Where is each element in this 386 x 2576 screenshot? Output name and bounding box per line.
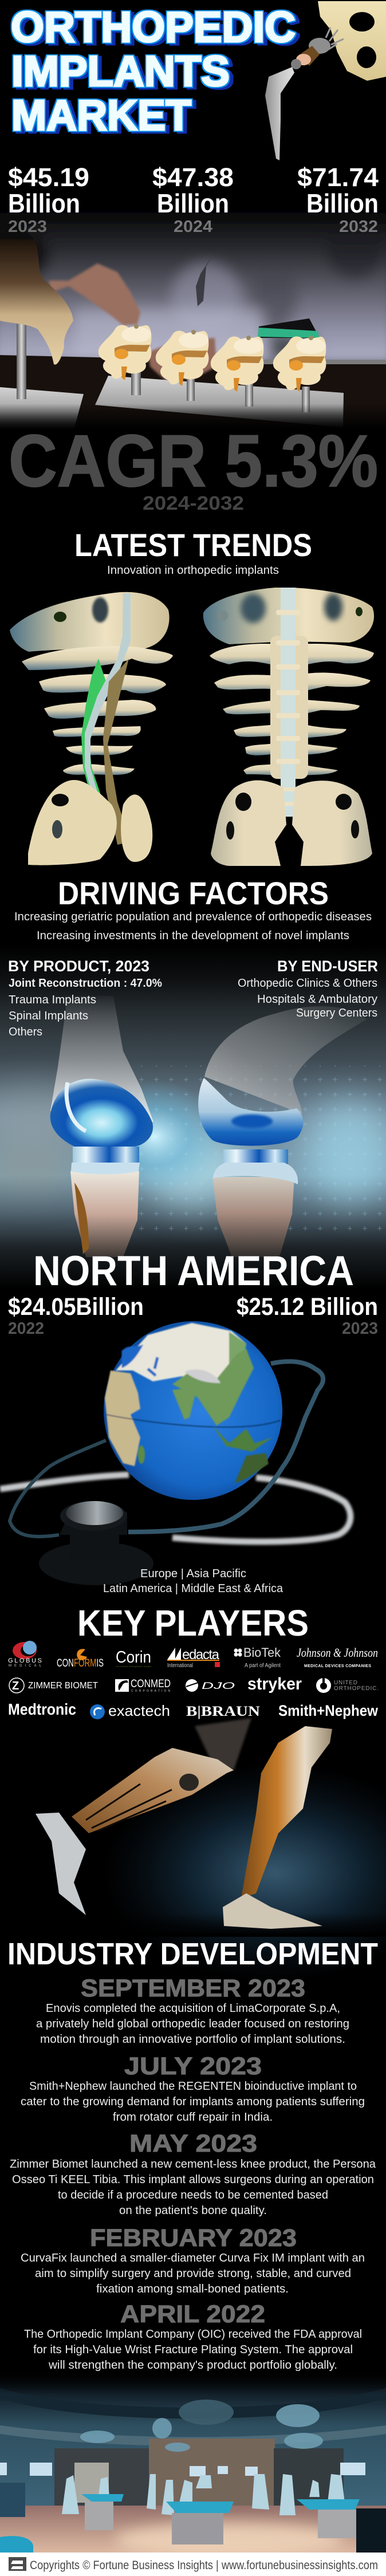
left skeleton model (0, 239, 73, 365)
logo: ConforMIS (57, 1649, 104, 1669)
stat: 2023 market size (8, 163, 89, 236)
logo: BioTek: A part of Agilent (245, 1663, 281, 1669)
title (11, 3, 296, 139)
development: July 2023 (21, 2053, 365, 2124)
upper hand (49, 263, 140, 325)
logo: United Orthopedic: UNITED (334, 1680, 357, 1686)
stat: 2024 market size: $47.38 (152, 163, 234, 192)
development: May 2023 (10, 2130, 376, 2217)
development: September 2023: motion through an innovative portfolio of implant solutions. (40, 2033, 345, 2046)
development: April 2022: The Orthopedic Implant Company (OIC) received the FDA approval (24, 2328, 362, 2341)
floor (0, 2506, 386, 2553)
development: September 2023: a privately held global orthopedic leader focused on restoring (36, 2018, 349, 2030)
top plate (10, 592, 170, 652)
left door (54, 2448, 149, 2508)
left tibial tray (71, 1147, 140, 1174)
image: operating room (0, 2371, 386, 2557)
monitors (0, 2463, 365, 2476)
development: September 2023 (36, 1975, 349, 2046)
latest trends text: Innovation in orthopedic implants (107, 564, 279, 577)
logo: BioTek: BioTek (243, 1645, 281, 1660)
left model base (0, 387, 84, 430)
pelvis left (28, 780, 152, 865)
vertebra model 1 (99, 324, 151, 380)
left femoral component (50, 1079, 153, 1147)
stat: north america 2022: 2022 (8, 1319, 44, 1338)
instrument bar (263, 360, 386, 364)
logo: Globus Medical: MEDICAL (9, 1664, 42, 1668)
development: April 2022 (24, 2301, 362, 2372)
by product list: Spinal Implants (9, 1010, 88, 1022)
regions text (103, 1567, 283, 1595)
stat: 2032 market size: $71.74 (297, 163, 379, 192)
right foot (223, 1893, 322, 1929)
acetabular cup (309, 38, 330, 54)
surgical lamps (80, 2400, 323, 2452)
development: February 2023 (21, 2224, 365, 2295)
heading: key players: KEY PLAYERS (77, 1602, 309, 1644)
vertebra model 4 (273, 336, 326, 392)
left foot (36, 1813, 86, 1915)
regions text: Latin America | Middle East & Africa (103, 1582, 283, 1595)
development: February 2023: CurvaFix launched a smaller-diameter Curva Fix IM implant with an (21, 2252, 365, 2264)
top plates (203, 588, 374, 644)
logo: stryker: stryker (247, 1675, 302, 1693)
by end-user list: Orthopedic Clinics & Others (238, 977, 377, 990)
logo: United Orthopedic: ORTHOPEDIC. (334, 1685, 379, 1692)
surgeons (62, 2474, 345, 2515)
stat: 2023 market size: $45.19 (8, 163, 89, 192)
background glow (103, 1764, 386, 1982)
left femur (50, 996, 153, 1122)
right tibial tray (213, 1149, 298, 1184)
image: spine side view with implant (10, 592, 173, 865)
by end-user list (238, 958, 378, 1019)
title: IMPLANTS (11, 47, 230, 95)
logo: ConforMIS: CONFORMIS (57, 1657, 104, 1669)
right tibia (212, 1177, 294, 1257)
globe sphere (104, 1321, 282, 1500)
logo: Zimmer Biomet: ZIMMER BIOMET (28, 1681, 98, 1691)
title: MARKET (11, 91, 191, 139)
ribs (22, 646, 173, 775)
implant green mesh (81, 659, 106, 810)
right femoral component (198, 1078, 303, 1146)
driving factors text: Increasing investments in the development of novel implants (37, 929, 349, 942)
development: May 2023: Osseo Ti KEEL Tibia. This implant allows surgeons during an operation (12, 2173, 374, 2186)
glow (0, 1088, 386, 1208)
development: February 2023: FEBRUARY 2023 (90, 2224, 297, 2252)
image: globe with stethoscope (0, 1321, 350, 1585)
side equipment (0, 2483, 386, 2553)
stat: 2024 market size: Billion (157, 188, 229, 218)
stat: north america 2022: $24.05Billion (8, 1293, 144, 1321)
development: May 2023: Zimmer Biomet launched a new cement-less knee product, the Persona (10, 2158, 376, 2171)
image: spine back view (203, 588, 374, 866)
heading: driving factors: DRIVING FACTORS (58, 875, 329, 911)
heading: latest trends: LATEST TRENDS (74, 527, 312, 563)
logo: Medacta (167, 1647, 220, 1669)
pelvis right (211, 780, 372, 866)
tablet on table (258, 318, 320, 338)
left model post (17, 312, 26, 399)
dark tubes (128, 1361, 323, 1532)
by product list: Others (9, 1026, 42, 1038)
dark table (0, 355, 386, 430)
logo: United Orthopedic (316, 1678, 379, 1693)
white tube (0, 1475, 350, 1542)
CAGR: 2024-2032 (143, 493, 244, 514)
tube reflection (39, 1542, 153, 1585)
logo: Johnson & Johnson: MEDICAL DEVICES COMPANIES (304, 1664, 371, 1668)
continents (105, 1323, 281, 1483)
icon: Fortune Business Insights logo (9, 2557, 26, 2571)
spine base (95, 376, 344, 427)
logo: Medacta: International (167, 1663, 193, 1669)
right femur (204, 1006, 367, 1114)
logo: ConMed (115, 1678, 171, 1693)
panel: hero photo of doctor with spine models (0, 212, 386, 430)
stat: 2024 market size (152, 163, 234, 236)
logo: Globus Medical (8, 1641, 42, 1668)
logo: B Braun: B|BRAUN (186, 1704, 260, 1719)
logo: Corin: Corin (116, 1648, 151, 1667)
femoral stem (265, 67, 294, 160)
glasses in pocket (196, 243, 220, 306)
vertebra model 3 (211, 336, 263, 392)
by end-user list: Hospitals & Ambulatory (257, 993, 377, 1006)
by product list (8, 958, 162, 1038)
stat: north america 2022 (8, 1293, 144, 1338)
stat: 2023 market size: 2023 (8, 218, 47, 236)
pelvis (318, 1, 386, 81)
development: May 2023: on the patient's bone quality. (119, 2204, 267, 2217)
by product list: Trauma Implants (9, 994, 96, 1006)
by end-user list: BY END-USER (277, 958, 378, 975)
development: April 2022: for its High-Value Wrist Fracture Plating System. The approval (33, 2343, 353, 2356)
development: July 2023: cater to the growing demand for implants among patients suffering (21, 2096, 365, 2108)
logo: Zimmer Biomet: Z (12, 1680, 19, 1692)
stat: 2032 market size: Billion (306, 188, 379, 218)
driving factors text (14, 911, 372, 942)
operating beds (81, 2494, 360, 2545)
logo: Corin: Connected Orthopaedic Insight (116, 1665, 151, 1668)
logo: ConMed: CONMED (131, 1678, 171, 1690)
development: September 2023: SEPTEMBER 2023 (81, 1975, 305, 2002)
left calf (72, 1748, 234, 1833)
stat: north america 2023 (237, 1293, 378, 1338)
screws (326, 27, 344, 49)
by end-user list: Surgery Centers (296, 1007, 377, 1019)
lower hand (148, 338, 216, 381)
left tibia (70, 1171, 139, 1257)
image: prosthetic running legs (0, 1718, 386, 1982)
back ribs (210, 644, 374, 776)
stat: 2032 market size (297, 163, 379, 236)
fade top (0, 2371, 386, 2394)
left thigh (195, 1718, 251, 1770)
doctor coat (0, 212, 386, 367)
by product list: Joint Reconstruction : 47.0% (9, 977, 162, 990)
logo: BioTek (234, 1645, 281, 1669)
development: February 2023: aim to simplify surgery and provide strong, stable, and curved (35, 2267, 351, 2280)
by product list: BY PRODUCT, 2023 (8, 958, 149, 975)
logo: Globus Medical: GLOBUS (8, 1657, 42, 1664)
logo: Medtronic: Medtronic (8, 1700, 76, 1718)
grid pattern (132, 1065, 386, 1237)
footer bar (0, 2553, 386, 2576)
spinal column (85, 593, 131, 802)
development: July 2023: Smith+Nephew launched the REGENTEN bioinductive implant to (29, 2080, 357, 2093)
driving factors text: Increasing geriatric population and prevalence of orthopedic diseases (14, 911, 372, 923)
title: ORTHOPEDIC (11, 3, 296, 51)
logo: ConMed: CORPORATION (131, 1689, 170, 1693)
background (0, 945, 386, 1289)
development: April 2022: will strengthen the company's product portfolio globally. (48, 2359, 337, 2372)
stat: 2032 market size: 2032 (339, 218, 378, 236)
right door (274, 2448, 344, 2508)
vertebrae column (270, 588, 308, 817)
logo: Zimmer Biomet (9, 1678, 98, 1693)
development: September 2023: Enovis completed the acquisition of LimaCorporate S.p.A, (46, 2002, 340, 2015)
regions text: Europe | Asia Pacific (140, 1567, 246, 1580)
logo: DJO (186, 1679, 235, 1692)
right leg (241, 1726, 332, 1898)
logo: exactech: exactech (108, 1702, 170, 1719)
logo: Medacta: edacta (182, 1647, 220, 1663)
stat: north america 2023: 2023 (342, 1319, 378, 1338)
logo: DJO: DJO (202, 1680, 235, 1691)
vertebra model 2 (156, 330, 208, 386)
development: May 2023: to decide if a procedure needs to be cemented based (58, 2189, 328, 2201)
development: May 2023: MAY 2023 (129, 2130, 257, 2157)
panel: knee implants (0, 945, 386, 1289)
development: April 2022: APRIL 2022 (120, 2301, 265, 2328)
posts (131, 367, 310, 412)
development: February 2023: fixation among small-boned patients. (96, 2283, 289, 2295)
stat: 2024 market size: 2024 (174, 218, 212, 236)
logo: Johnson & Johnson (297, 1645, 378, 1668)
development: July 2023: from rotator cuff repair in India. (113, 2111, 273, 2124)
icon: hip implant with pelvis (265, 1, 386, 160)
center wall (149, 2439, 275, 2508)
ceiling and walls (0, 2371, 386, 2508)
development: July 2023: JULY 2023 (124, 2053, 262, 2080)
heading: north america: NORTH AMERICA (33, 1248, 354, 1294)
chestpiece (60, 1512, 127, 1561)
fade hero bottom (0, 404, 386, 430)
stat: 2023 market size: Billion (8, 188, 80, 218)
